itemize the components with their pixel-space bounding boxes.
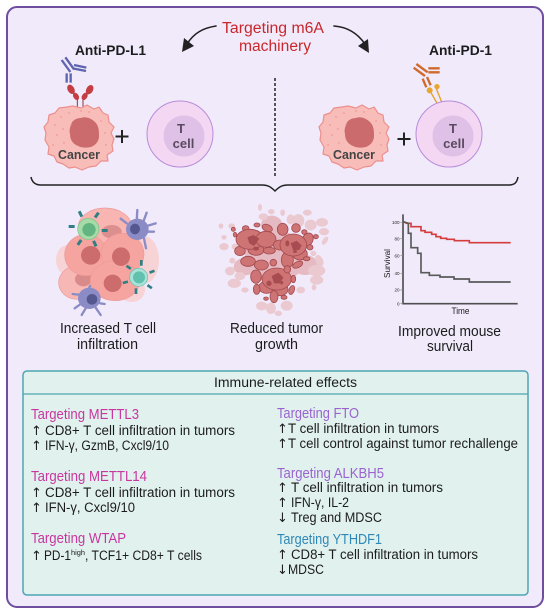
caption: Increased T cell infiltration: Increased T cell [60,321,156,337]
chart: survival curve: 80 [394,236,400,242]
text block: ALKBH5: ↓ [277,511,288,526]
caption: Improved mouse survival: Improved mouse [398,324,501,340]
text block: METTL3: CD8+ T cell infiltration in tumors [45,423,235,438]
text block: ALKBH5: T cell infiltration in tumors [291,480,443,495]
text block: WTAP: ↑ [31,549,42,564]
text block: YTHDF1: Targeting YTHDF1 [277,532,382,548]
arrow: to Anti-PD-1 [334,26,369,53]
text block: METTL14: ↑ [31,501,42,516]
text block: YTHDF1: ↑ [277,548,288,563]
caption: Increased T cell infiltration [60,321,156,353]
icon: T cell right: cell [443,136,465,151]
text block: METTL14 [31,469,235,516]
text block: METTL3 [31,407,235,454]
text block: YTHDF1: ↓ [277,563,288,578]
plus right [398,132,410,146]
brace [31,177,518,191]
chart: survival curve: 40 [394,271,400,276]
caption: Reduced tumor growth: Reduced tumor [230,321,323,337]
chart: survival curve: 60 [394,254,400,258]
caption: Reduced tumor growth: growth [255,337,298,353]
text block: FTO: Targeting FTO [277,406,359,422]
icon: T cell left: T [177,121,185,136]
text block: ALKBH5: Treg and MDSC [291,510,382,525]
icon: cancer cell right [319,105,389,170]
title: Targeting m6A machinery: machinery [239,38,311,55]
text block: ALKBH5: IFN-γ, IL-2 [291,495,349,510]
title: Targeting m6A machinery [222,20,325,55]
text block: ALKBH5: ↑ [277,496,288,511]
text block: WTAP: , TCF1+ CD8+ T cells [85,548,202,563]
text block: WTAP: Targeting WTAP [31,531,126,547]
chart: survival curve [382,214,518,316]
title: Targeting m6A machinery: Targeting m6A [222,20,325,37]
icon: cancer cell right: Cancer [333,147,375,162]
text block: ALKBH5 [277,466,443,526]
text block: FTO: ↑ [277,437,288,452]
icon: purple antibody with PD-L1 receptor [62,57,95,111]
text block: METTL3: IFN-γ, GzmB, Cxcl9/10 [45,438,169,453]
text block: METTL3: Targeting METTL3 [31,407,139,423]
caption: Reduced tumor growth [230,321,323,353]
text block: WTAP: high [71,550,85,557]
text block: METTL3: ↑ [31,439,42,454]
text block: METTL14: Targeting METTL14 [31,469,147,485]
icon: T cell left: cell [173,136,194,151]
text block: ALKBH5: ↑ [277,481,288,496]
plus left [116,130,128,143]
icon: cancer cell left [44,105,114,170]
text block: FTO: T cell control against tumor rechallenge [288,436,518,451]
panel: immune-related effects [23,371,528,595]
icon: T cell right [416,101,482,167]
chart: survival curve: Survival [382,249,392,278]
icon: T cell left [147,101,213,167]
chart: survival curve: Time [452,306,470,316]
chart: survival curve: 0 [397,302,400,306]
heading: Anti-PD-L1: Anti-PD-L1 [75,42,146,58]
illustration: T cell infiltration in tumor [56,208,159,315]
text block: WTAP: PD-1 [44,548,71,563]
text block: YTHDF1 [277,532,478,578]
text block: METTL14: IFN-γ, Cxcl9/10 [45,500,135,515]
text block: FTO: T cell infiltration in tumors [288,421,439,436]
illustration: reduced tumor growth [219,204,330,316]
heading: Anti-PD-1: Anti-PD-1 [429,42,492,58]
arrow: to Anti-PD-L1 [182,26,216,52]
icon: cancer cell left: Cancer [58,147,100,162]
text block: METTL14: ↑ [31,486,42,501]
text block: YTHDF1: CD8+ T cell infiltration in tumors [291,547,478,562]
chart: survival curve: 100 [392,220,400,225]
chart: survival curve: 20 [394,288,400,292]
divider: dashed line [274,78,276,176]
heading: immune-related effects: Immune-related effects [214,375,357,390]
caption: Improved mouse survival: survival [427,339,473,355]
text block: METTL3: ↑ [31,424,42,439]
text block: YTHDF1: MDSC [288,562,324,577]
caption: Increased T cell infiltration: infiltration [77,337,138,353]
icon: orange antibody with PD-1 receptor [414,64,443,106]
text block: FTO: ↑ [277,422,288,437]
text block: FTO [277,406,518,452]
caption: Improved mouse survival [398,324,501,355]
text block: WTAP [31,531,202,564]
text block: METTL14: CD8+ T cell infiltration in tumors [45,485,235,500]
icon: T cell right: T [449,121,457,136]
text block: ALKBH5: Targeting ALKBH5 [277,466,384,482]
